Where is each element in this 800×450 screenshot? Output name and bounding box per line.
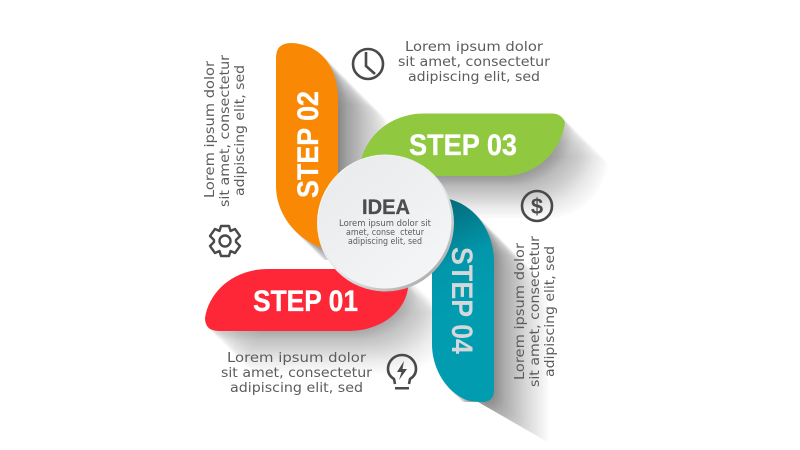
- text block: top: sit amet, consectetur: [398, 55, 551, 70]
- icon: dollar: [522, 191, 552, 221]
- step 02 orange petal: [276, 43, 338, 250]
- shadow: step 01: [206, 270, 450, 373]
- text block: right: adipiscing elit, sed: [543, 246, 558, 377]
- step 03 label: STEP 03: [409, 129, 517, 162]
- text block: bottom: [221, 351, 373, 396]
- text block: bottom: sit amet, consectetur: [221, 366, 373, 381]
- text block: right: Lorem ipsum dolor: [513, 242, 528, 380]
- center text: Lorem ipsum dolor sit: [339, 219, 432, 229]
- text block: top: adipiscing elit, sed: [408, 70, 540, 85]
- text block: top: [398, 40, 551, 85]
- icon: light bulb: [388, 355, 416, 390]
- text block: bottom: adipiscing elit, sed: [230, 381, 363, 396]
- step 02 label: STEP 02: [292, 91, 325, 198]
- text block: top: Lorem ipsum dolor: [405, 40, 544, 55]
- shadow: step 04: [450, 214, 545, 440]
- text block: left: adipiscing elit, sed: [233, 65, 248, 196]
- icon: clock: [353, 49, 383, 79]
- step 04 teal petal: [432, 199, 494, 402]
- shadow: step 02: [295, 57, 388, 260]
- step 03 green petal: [361, 114, 565, 176]
- icon: gear: [210, 226, 240, 256]
- text block: bottom: Lorem ipsum dolor: [227, 351, 367, 366]
- center text: [339, 219, 432, 247]
- text block: left: [203, 54, 248, 207]
- text block: right: [513, 235, 558, 387]
- step 01 label: STEP 01: [253, 285, 358, 318]
- text block: left: sit amet, consectetur: [218, 54, 233, 207]
- step 04 label: STEP 04: [445, 247, 478, 354]
- text block: right: sit amet, consectetur: [528, 235, 543, 387]
- icon: dollar: $: [531, 194, 543, 219]
- center text: amet, conse ctetur: [346, 228, 424, 238]
- shadow: step 03: [362, 114, 607, 218]
- center circle: [317, 154, 454, 292]
- center heading: IDEA: [362, 196, 410, 219]
- text block: left: Lorem ipsum dolor: [203, 60, 218, 198]
- step 01 red petal: [205, 269, 408, 331]
- center text: adipiscing elit, sed: [348, 237, 422, 247]
